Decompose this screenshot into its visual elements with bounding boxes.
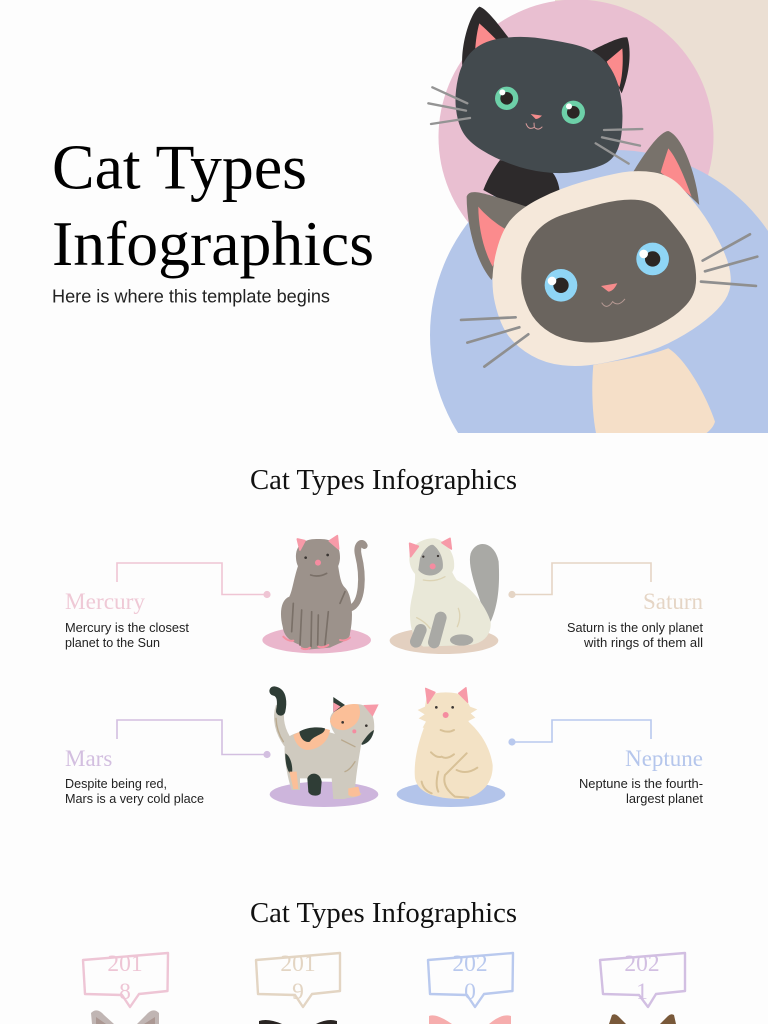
icon: siamese cat [461, 131, 757, 433]
speech bubble: 2020: 202 [452, 951, 488, 977]
section heading: timeline: Cat Types Infographics [250, 898, 517, 929]
text: neptune description: largest planet [626, 792, 704, 806]
icon: grey cat [262, 536, 371, 653]
speech bubble: 2020 [428, 951, 513, 1007]
text: mercury description: Mercury is the closest [65, 621, 190, 635]
connector: neptune [509, 720, 651, 745]
label: saturn: Saturn [643, 589, 703, 614]
icon: cat ears 2018 [91, 1010, 159, 1024]
icon: fluffy cat [397, 688, 505, 807]
text: saturn description [567, 621, 704, 650]
title: Infographics [52, 208, 374, 279]
icon: cat ears 2020 [429, 1015, 511, 1024]
icon: calico cat [270, 691, 379, 807]
panel: mercury [65, 536, 371, 653]
label: neptune: Neptune [625, 746, 703, 771]
title: Cat Types [52, 132, 307, 202]
icon: cream cat [390, 538, 499, 654]
connector: mercury [117, 563, 270, 597]
icon: cat ears 2019 [259, 1020, 337, 1024]
text: saturn description: with rings of them all [583, 636, 703, 650]
panel: mars [65, 691, 379, 807]
panel: 2019 [256, 951, 340, 1024]
speech bubble: 2018 [83, 951, 168, 1007]
text: neptune description: Neptune is the fourth- [579, 777, 703, 791]
speech bubble: 2019: 9 [292, 979, 304, 1005]
panel: saturn [390, 538, 704, 654]
text: saturn description: Saturn is the only planet [567, 621, 704, 635]
speech bubble: 2019 [256, 951, 340, 1007]
speech bubble: 2018: 8 [119, 979, 131, 1005]
text: mars description: Mars is a very cold place [65, 792, 204, 806]
title [52, 132, 374, 279]
panel: neptune [397, 688, 704, 807]
text: mars description [65, 777, 204, 806]
speech bubble: 2019: 201 [280, 951, 316, 977]
panel: hero illustration [427, 0, 768, 433]
icon: black cat [428, 7, 642, 210]
speech bubble: 2021: 1 [636, 979, 648, 1005]
label: mars: Mars [65, 746, 112, 771]
text: mars description: Despite being red, [65, 777, 167, 791]
text: mercury description: planet to the Sun [65, 636, 160, 650]
icon: cat ears 2021 [609, 1014, 676, 1024]
text: neptune description [579, 777, 704, 806]
speech bubble: 2021: 202 [624, 951, 660, 977]
speech bubble: 2018: 201 [107, 951, 143, 977]
section heading: cat types: Cat Types Infographics [250, 465, 517, 496]
label: mercury: Mercury [65, 589, 146, 614]
text: mercury description [65, 621, 190, 650]
speech bubble: 2021 [600, 951, 685, 1007]
panel: 2018 [83, 951, 168, 1024]
panel: 2020 [428, 951, 513, 1024]
subtitle: Here is where this template begins [52, 286, 330, 306]
connector: saturn [509, 563, 651, 597]
speech bubble: 2020: 0 [464, 979, 476, 1005]
panel: 2021 [600, 951, 685, 1024]
connector: mars [117, 720, 270, 757]
